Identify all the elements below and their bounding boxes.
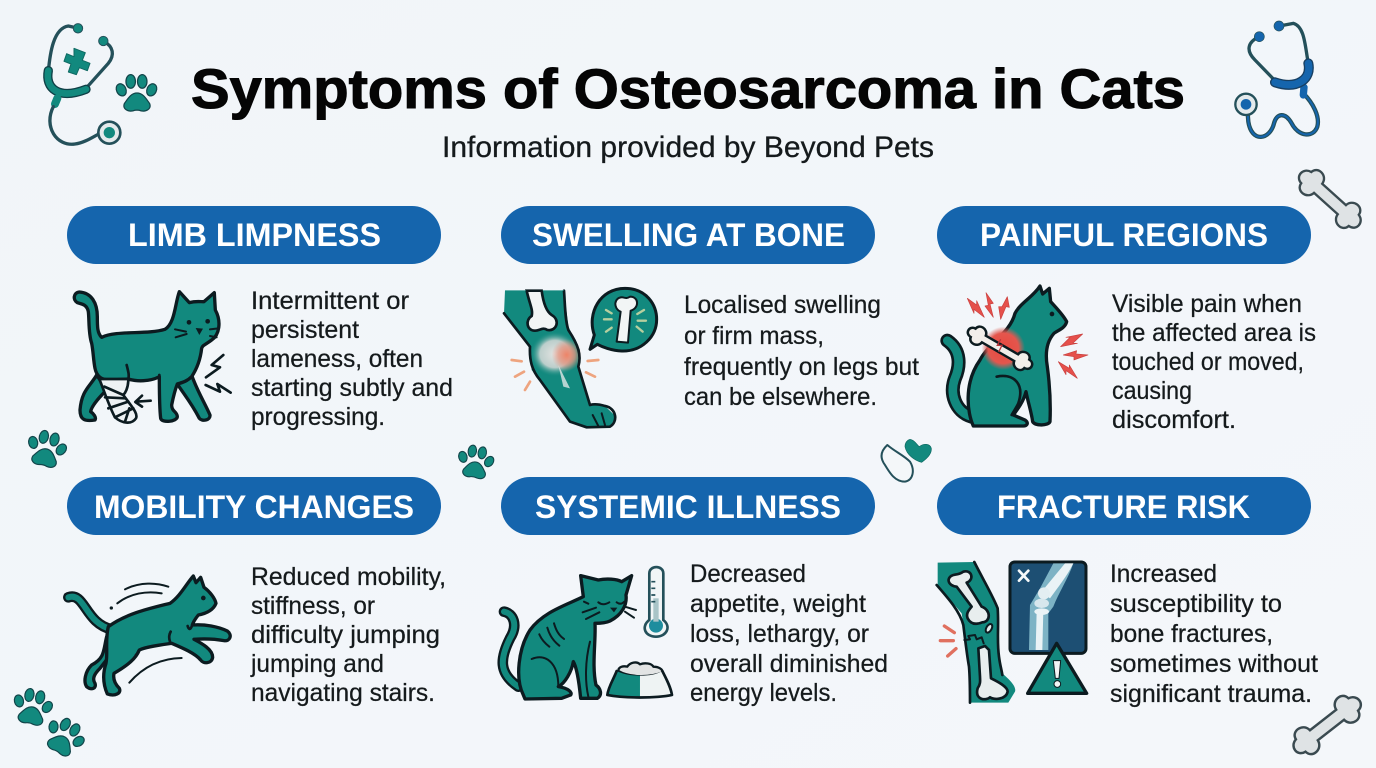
icon: fractured leg, x-ray and warning triangle	[937, 562, 1087, 703]
description	[1110, 560, 1318, 708]
heading pill	[67, 206, 441, 264]
icon: lethargic cat, thermometer and food bowl	[503, 567, 672, 699]
description	[684, 291, 919, 411]
title: Symptoms of Osteosarcoma in Cats	[191, 57, 1185, 120]
icon: paw bottom left lower	[38, 711, 92, 762]
heading pill: PAINFUL REGIONS	[980, 217, 1268, 253]
subtitle: Information provided by Beyond Pets	[442, 131, 934, 164]
description: frequently on legs but	[684, 353, 919, 381]
heading pill	[937, 477, 1311, 535]
panel: fracture risk	[937, 477, 1318, 708]
heading pill	[501, 206, 875, 264]
description: navigating stairs.	[251, 679, 435, 707]
heading pill: LIMB LIMPNESS	[128, 217, 381, 253]
description: Increased	[1110, 560, 1217, 588]
description: discomfort.	[1112, 406, 1236, 434]
icon: swollen leg with bone callout	[504, 288, 657, 427]
heading pill	[67, 477, 441, 535]
icon: stethoscope with medical cross	[48, 24, 120, 144]
icon: running cat	[68, 576, 230, 695]
icon: paw top	[114, 75, 159, 111]
description: overall diminished	[690, 650, 888, 678]
panel: mobility changes	[67, 477, 446, 707]
description: jumping and	[250, 650, 384, 678]
description: sometimes without	[1110, 650, 1318, 678]
description: difficulty jumping	[251, 621, 440, 649]
panel: painful regions	[937, 206, 1316, 434]
icon: paw left	[22, 427, 71, 471]
icon: bone top right	[1292, 162, 1368, 236]
panel: swelling at bone	[501, 206, 919, 427]
description	[251, 287, 453, 431]
description: progressing.	[251, 403, 385, 431]
icon: limping cat with bandaged leg	[74, 292, 231, 423]
heading pill: SYSTEMIC ILLNESS	[535, 489, 841, 525]
description: or firm mass,	[684, 322, 824, 350]
description	[1112, 290, 1316, 434]
description: Intermittent or	[251, 287, 409, 315]
description	[690, 560, 888, 707]
icon: decorative sketch with teal heart	[881, 439, 931, 482]
description	[250, 563, 446, 707]
description: starting subtly and	[251, 374, 453, 402]
description: susceptibility to	[1110, 590, 1282, 618]
description: loss, lethargy, or	[690, 620, 869, 648]
panel: systemic illness	[501, 477, 888, 707]
description: lameness, often	[251, 345, 423, 373]
heading pill: SWELLING AT BONE	[532, 217, 845, 253]
heading pill	[937, 206, 1311, 264]
description: bone fractures,	[1110, 620, 1273, 648]
description: significant trauma.	[1110, 680, 1312, 708]
description: appetite, weight	[690, 590, 866, 618]
description: Visible pain when	[1112, 290, 1302, 318]
description: touched or moved,	[1112, 348, 1304, 376]
description: can be elsewhere.	[684, 383, 877, 411]
description: stiffness, or	[251, 592, 375, 620]
description: persistent	[251, 316, 359, 344]
panel: limb limpness	[67, 206, 453, 431]
description: Reduced mobility,	[251, 563, 446, 591]
icon: sitting cat with painful bone	[947, 286, 1088, 426]
icon: paw centre	[454, 443, 497, 481]
description: the affected area is	[1112, 319, 1316, 347]
heading pill: FRACTURE RISK	[997, 489, 1250, 525]
heading pill	[501, 477, 875, 535]
icon: paw bottom left upper	[8, 685, 57, 728]
description: Decreased	[690, 560, 806, 588]
description: causing	[1112, 377, 1192, 405]
heading pill: MOBILITY CHANGES	[94, 489, 414, 525]
description: Localised swelling	[684, 291, 881, 319]
icon: bone bottom right	[1286, 688, 1368, 762]
icon: blue stethoscope	[1235, 21, 1318, 137]
description: energy levels.	[690, 679, 837, 707]
